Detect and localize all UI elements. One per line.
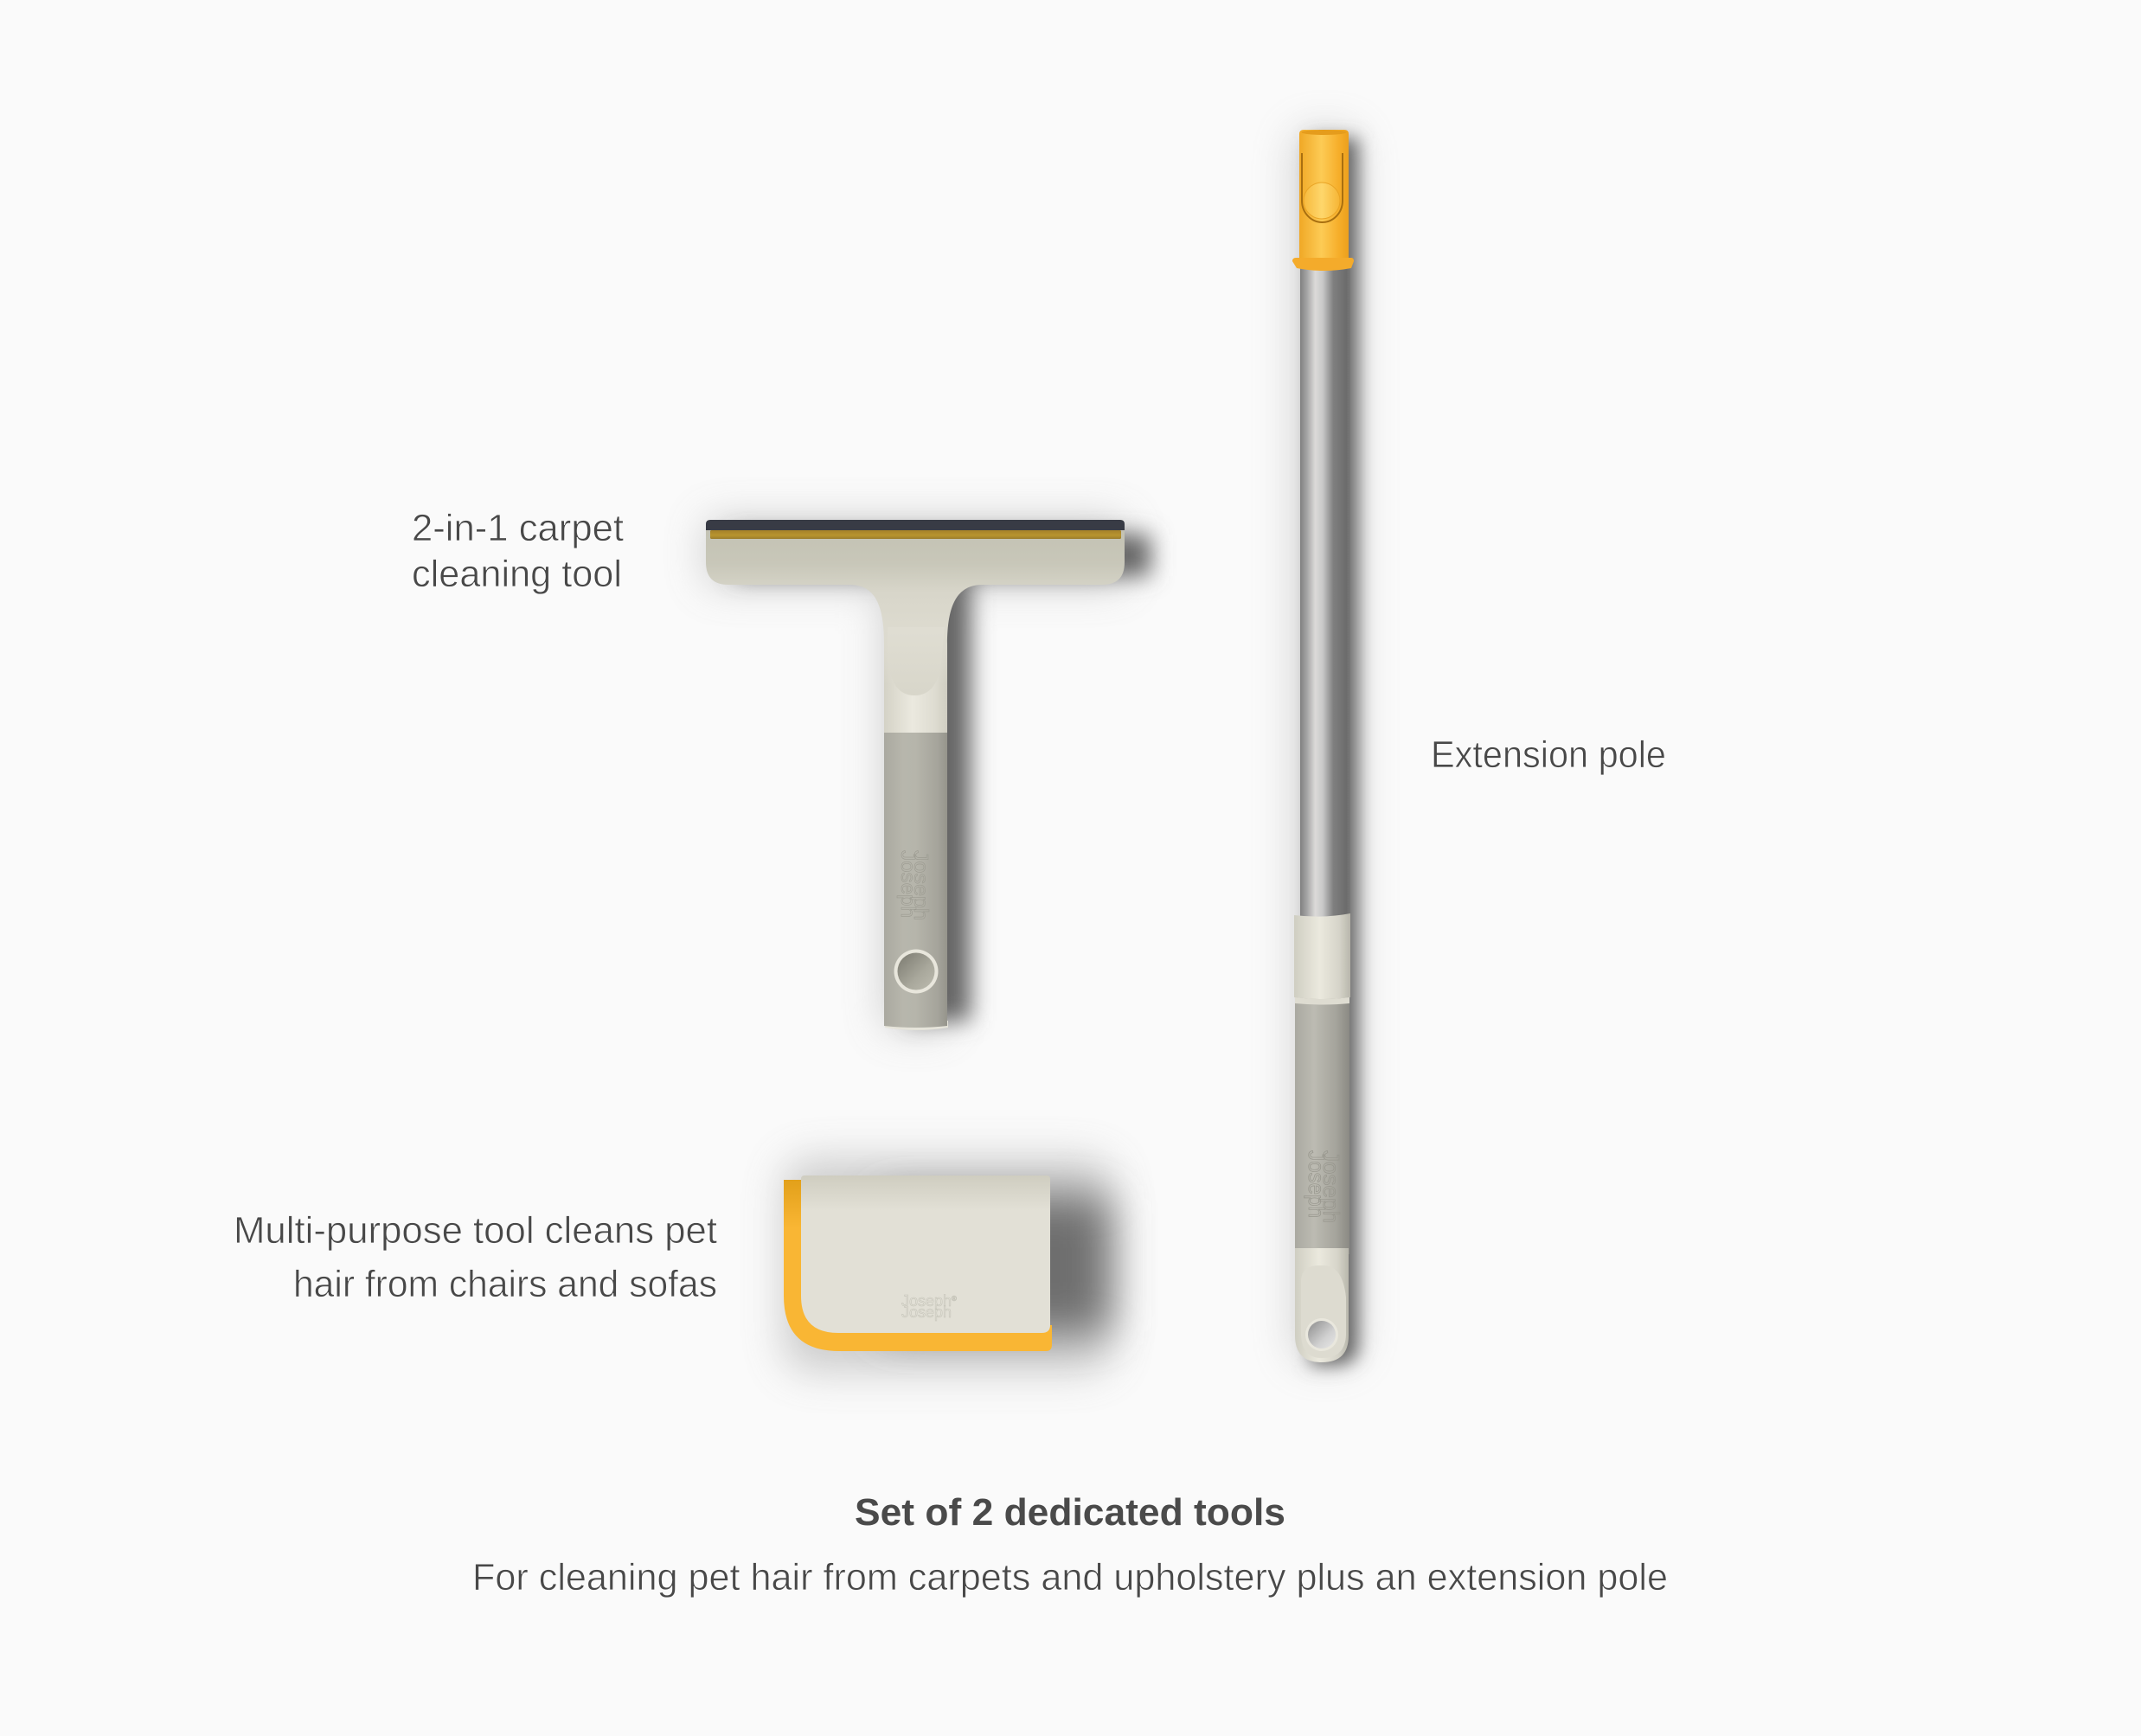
cap slot: [1302, 153, 1343, 222]
pole logo: [1304, 1150, 1344, 1223]
finger scoop: [888, 627, 945, 695]
label: multi-purpose tool: hair from chairs and sofas: [293, 1263, 717, 1305]
tool logo: [901, 1291, 957, 1321]
pole logo: Joseph: [1318, 1150, 1344, 1223]
shadow: pole: [1292, 130, 1358, 1365]
label: 2-in-1 carpet cleaning tool: [412, 507, 624, 595]
hanging hole: [894, 950, 938, 993]
grip scoop: [1301, 1265, 1346, 1358]
cap collar: [1292, 258, 1354, 271]
yellow cap: [1299, 130, 1349, 259]
rubber blade: [706, 520, 1125, 530]
cap rim: [1301, 130, 1346, 135]
tool logo: Joseph: [901, 1291, 952, 1310]
label: multi-purpose tool: Multi-purpose tool cleans pet: [234, 1209, 717, 1252]
product: 2-in-1 carpet cleaning tool: [706, 520, 1151, 1030]
pole logo: Joseph: [1304, 1150, 1330, 1218]
handle logo: [897, 850, 933, 920]
brass bristle strip: [710, 530, 1121, 539]
tool logo: Joseph: [901, 1303, 952, 1321]
label: extension pole: Extension pole: [1431, 733, 1666, 776]
sleeve ring: [1295, 997, 1349, 1005]
grey handle: [884, 733, 947, 1028]
lower grey section: [1295, 995, 1349, 1254]
shadow: multi-purpose tool: [784, 1159, 1112, 1371]
product: multi-purpose upholstery tool: [784, 1159, 1112, 1371]
product: extension pole: [1292, 130, 1358, 1365]
heading: Set of 2 dedicated tools: [855, 1491, 1285, 1534]
label: 2-in-1 carpet cleaning tool: cleaning tool: [412, 553, 622, 595]
tool logo: ®: [952, 1295, 957, 1303]
label: multi-purpose tool: [234, 1209, 717, 1305]
handle logo: Joseph: [897, 850, 920, 918]
pole bottom grip: [1295, 1248, 1349, 1362]
yellow brush edge: [784, 1180, 1052, 1351]
squeegee head and neck: [706, 520, 1125, 733]
cap button: [1304, 183, 1340, 219]
handle end cap: [884, 1021, 948, 1030]
handle logo: Joseph: [910, 850, 933, 920]
shadow: carpet tool: [706, 520, 1151, 1029]
silver pole tube: [1300, 259, 1350, 926]
cream body: [801, 1175, 1050, 1333]
label: 2-in-1 carpet cleaning tool: 2-in-1 carpet: [412, 507, 624, 549]
subheading: For cleaning pet hair from carpets and upholstery plus an extension pole: [472, 1556, 1668, 1598]
cream sleeve: [1294, 913, 1350, 999]
grip hole: [1305, 1318, 1338, 1351]
collar: [884, 656, 947, 733]
